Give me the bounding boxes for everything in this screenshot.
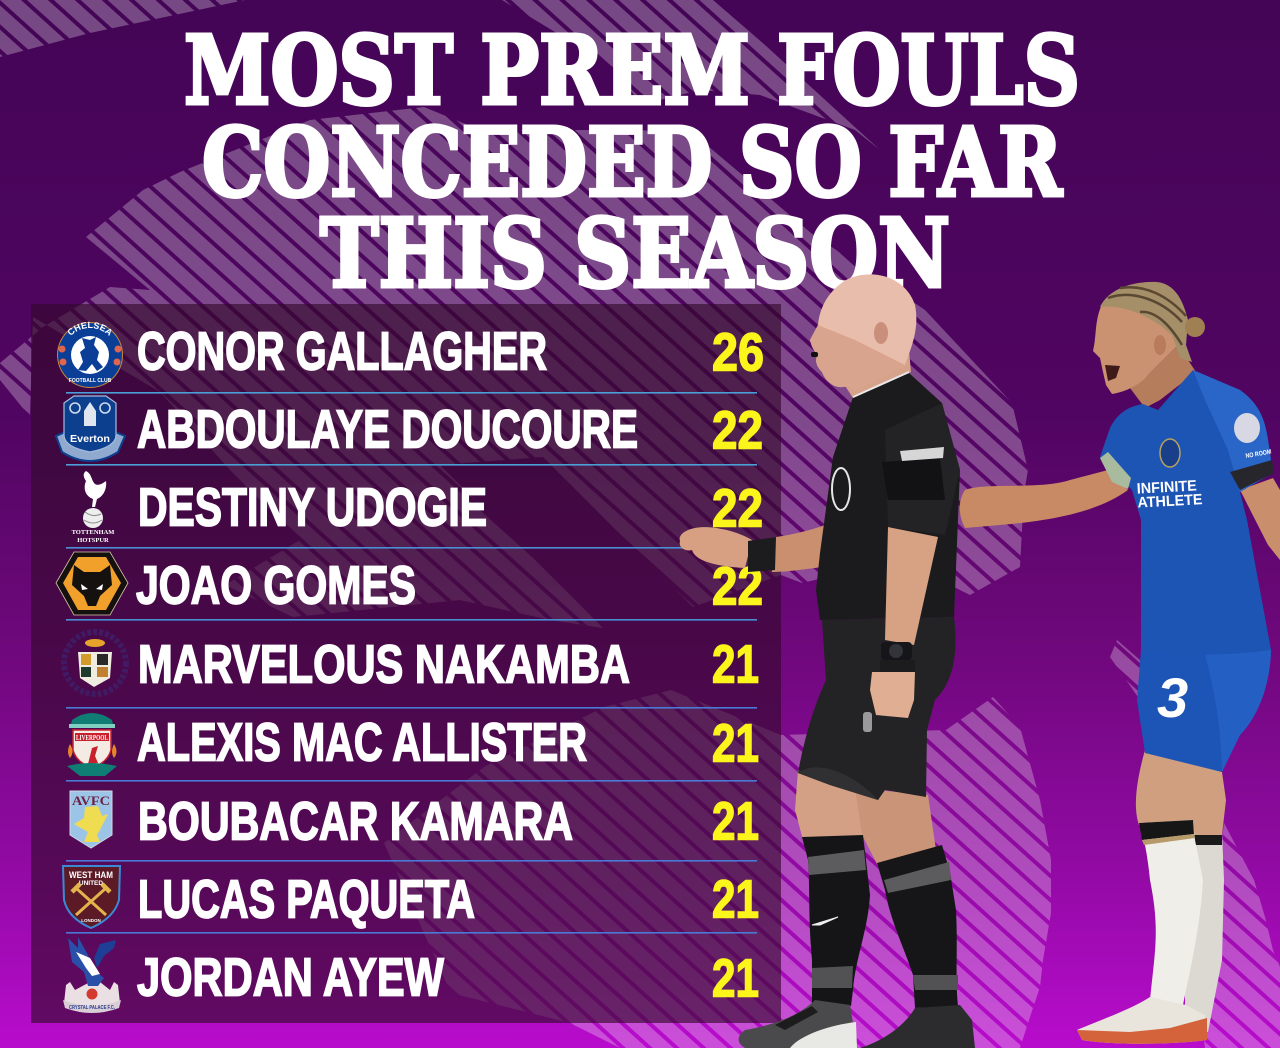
icon: Crystal Palace crest: CRYSTAL PALACE F.C. [69,1005,116,1011]
hair [1100,282,1192,362]
icon: Wolves crest [56,552,128,615]
player name: CONOR GALLAGHER [137,322,547,382]
foul count: 26 [712,322,764,382]
neck [1130,345,1196,408]
foul count: 21 [712,714,759,774]
row: Marvelous Nakamba [64,632,759,709]
sleeve band [1230,460,1274,490]
panel: league table [31,304,781,1023]
icon: Aston Villa crest: AVFC [72,793,110,808]
player name: LUCAS PAQUETA [138,870,475,930]
extended arm [960,470,1128,528]
mouth [1105,365,1120,381]
thigh and knee [1136,750,1226,835]
icon: Chelsea crest [57,322,123,388]
back leg [1185,832,1224,1032]
icon: Tottenham crest: HOTSPUR [77,537,109,544]
front sock [1139,820,1203,1005]
photo: referee [680,274,975,1048]
shirt [1100,370,1273,654]
row: Joao Gomes [56,552,763,621]
captain armband [1100,452,1131,489]
shirt sponsor [1136,477,1203,512]
foul count: 22 [712,478,763,538]
sleeve text: NO ROOM [1245,449,1272,460]
shirt sponsor: ATHLETE [1137,491,1203,512]
icon: Everton crest: Everton [70,433,110,445]
left boot [739,1000,857,1048]
icon: West Ham crest [63,866,120,928]
title: CONCEDED SO FAR [202,108,1063,218]
right arm [885,527,938,645]
row: Alexis Mac Allister [66,712,759,782]
right arm [1240,478,1280,560]
row: Conor Gallagher [57,322,764,394]
left arm [770,525,825,572]
foul count: 21 [712,634,759,694]
icon: Luton crest [64,632,126,694]
title: THIS SEASON [320,198,950,310]
icon: Chelsea crest: FOOTBALL CLUB [69,378,112,384]
photo: Conor Gallagher [960,282,1280,1044]
microphone [811,352,818,357]
player name: JOAO GOMES [136,556,416,616]
row: Abdoulaye Doucoure [56,396,763,466]
player name: DESTINY UDOGIE [138,478,487,538]
icon: Tottenham crest [72,471,114,544]
icon: Liverpool crest [67,713,117,776]
row: Jordan Ayew [63,937,759,1013]
player name: JORDAN AYEW [137,948,444,1008]
club badge [1160,439,1180,467]
ear [874,322,888,344]
row: Destiny Udogie [66,471,763,549]
icon: Chelsea crest: CHELSEA [68,322,112,336]
shorts [1137,650,1271,772]
sleeve [885,403,960,535]
hair bun [1185,317,1205,337]
shirt number: 3 [1157,666,1188,729]
face [1093,298,1178,394]
armband [882,458,945,500]
icon: Crystal Palace crest [63,937,121,1013]
icon: Tottenham crest: TOTTENHAM [72,529,114,536]
shorts [798,617,956,800]
boot [1077,997,1207,1044]
right sock [877,845,958,1008]
hand [680,527,752,568]
foul count: 21 [712,870,759,930]
league badge [1234,413,1260,443]
shirt [816,373,960,620]
shirt sponsor: INFINITE [1136,477,1197,498]
row: Boubacar Kamara [66,791,759,862]
foul count: 21 [712,948,759,1008]
icon: West Ham crest: WEST HAM [69,870,113,880]
icon: West Ham crest: UNITED [79,880,103,887]
right boot [860,1005,975,1048]
icon: Liverpool crest: LIVERPOOL [76,734,108,742]
icon: Aston Villa crest [70,791,112,848]
player name: MARVELOUS NAKAMBA [138,634,630,694]
watch [881,642,912,660]
title: MOST PREM FOULS [184,16,1080,126]
row: Lucas Paqueta [63,866,759,934]
head [810,274,916,390]
neck [838,340,911,398]
icon: West Ham crest: LONDON [81,918,101,923]
wristband [748,537,776,572]
right hand [870,672,915,718]
icon: Everton crest [56,396,125,461]
title [184,16,1080,310]
player name: ABDOULAYE DOUCOURE [137,400,638,460]
whistle [863,712,872,732]
badge [832,468,850,510]
foul count: 21 [712,792,759,852]
player name: ALEXIS MAC ALLISTER [137,712,587,772]
ear [1154,335,1166,355]
thighs [795,770,863,840]
foul count: 22 [712,400,763,460]
player name: BOUBACAR KAMARA [138,792,573,852]
left sock [802,835,870,1006]
foul count: 22 [712,556,763,616]
